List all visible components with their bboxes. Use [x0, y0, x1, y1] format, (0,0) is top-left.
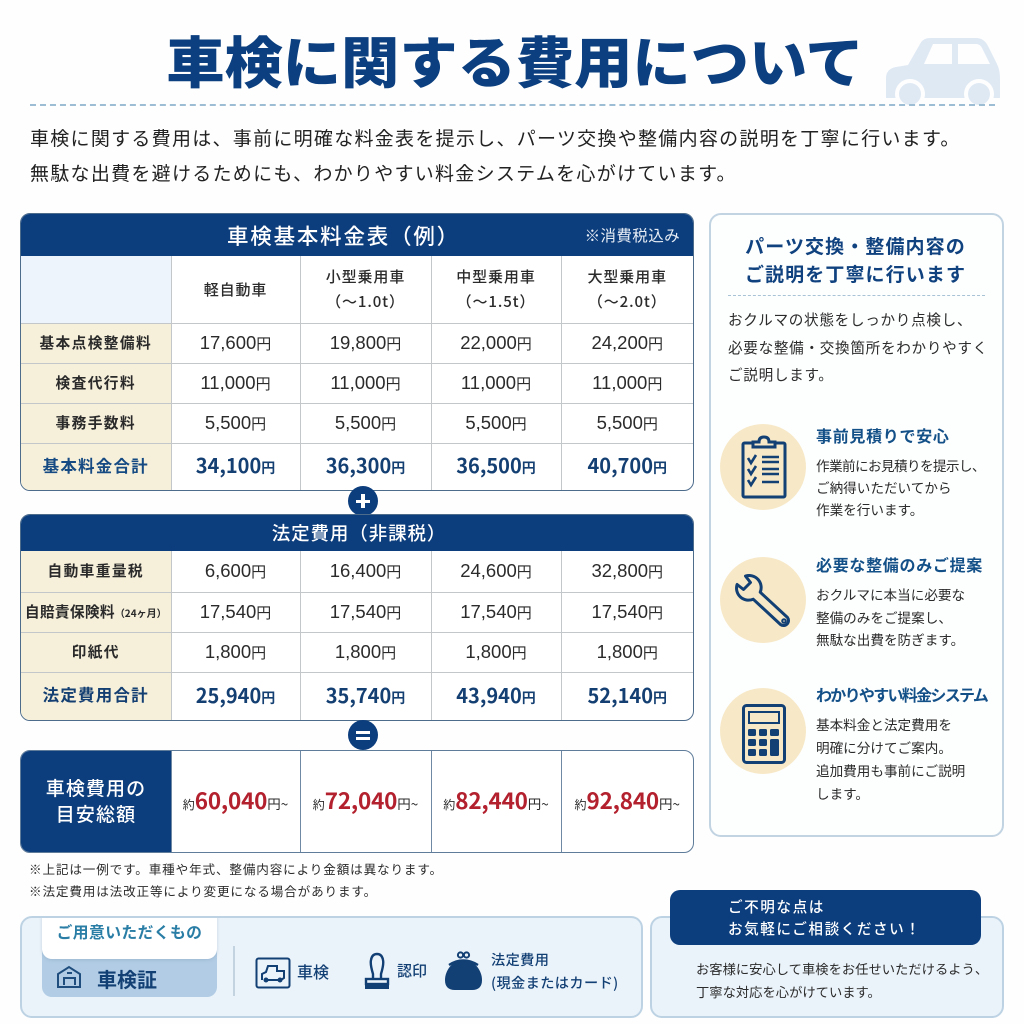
- consultation text: [696, 959, 988, 1001]
- basic fee rows: 11,000円: [592, 372, 662, 394]
- basic fee rows: 中型乗用車: [456, 266, 536, 287]
- icon: certificate: [57, 966, 81, 988]
- label: statutory fees: (現金またはカード): [491, 972, 619, 992]
- panel: basic fee table: [20, 213, 694, 491]
- table header: [21, 515, 693, 551]
- total amounts: 約60,040円~: [183, 784, 288, 816]
- basic fee rows: （～1.5t）: [457, 291, 535, 312]
- basic fee rows: 5,500円: [205, 412, 266, 434]
- icon: calculator: [720, 688, 806, 774]
- item: estimate: 事前見積りで安心: [816, 423, 950, 447]
- total amounts: [171, 751, 680, 852]
- total label: 車検費用の: [46, 774, 146, 801]
- icon: seal stamp: [364, 952, 390, 989]
- basic fee rows: 19,800円: [330, 332, 401, 354]
- tab: heading: ご用意いただくもの: [57, 920, 202, 943]
- statutory fee rows: 43,940円: [456, 680, 536, 709]
- basic fee rows: 17,600円: [200, 332, 271, 354]
- label: statutory fees: 法定費用: [491, 950, 549, 970]
- basic fee rows: 36,300円: [326, 450, 405, 479]
- basic fee rows: 11,000円: [330, 372, 401, 394]
- statutory fee rows: 17,540円: [591, 600, 663, 622]
- footnotes: ※法定費用は法改正等により変更になる場合があります。: [29, 881, 377, 900]
- table header: 法定費用（非課税）: [272, 520, 446, 546]
- statutory fee rows: 17,540円: [460, 600, 532, 622]
- title: 車検に関する費用について: [166, 19, 864, 99]
- icon: car key box: [256, 958, 290, 988]
- statutory fee rows: 1,800円: [335, 640, 396, 662]
- basic fee rows: 11,000円: [200, 372, 271, 394]
- consultation text: お客様に安心して車検をお任せいただけるよう、: [696, 959, 988, 978]
- statutory fee rows: 35,740円: [326, 680, 405, 709]
- basic fee rows: 小型乗用車: [326, 266, 405, 287]
- icon: clipboard: [720, 424, 806, 510]
- item: clear pricing: 明確に分けてご案内。: [816, 737, 952, 757]
- basic fee rows: 22,000円: [460, 332, 532, 354]
- basic fee rows: 検査代行料: [56, 372, 136, 393]
- basic fee rows: 基本点検整備料: [39, 332, 152, 353]
- basic fee rows: 36,500円: [456, 450, 536, 479]
- label: 車検: 車検: [297, 959, 329, 983]
- side heading: [745, 232, 966, 287]
- side heading: パーツ交換・整備内容の: [745, 232, 966, 259]
- basic fee rows: 事務手数料: [56, 412, 136, 433]
- statutory fee rows: 52,140円: [588, 680, 667, 709]
- item: necessary maintenance: おクルマに本当に必要な: [816, 584, 965, 604]
- total label: 目安総額: [56, 800, 136, 827]
- footnotes: ※上記は一例です。車種や年式、整備内容により金額は異なります。: [29, 859, 443, 878]
- item: necessary maintenance: 整備のみをご提案し、: [816, 606, 952, 626]
- consultation text: 丁寧な対応を心がけています。: [696, 982, 881, 1001]
- basic fee rows: 40,700円: [588, 450, 667, 479]
- basic fee rows: 11,000円: [461, 372, 531, 394]
- total amounts: 約72,040円~: [313, 784, 418, 816]
- basic fee rows: 24,200円: [591, 332, 663, 354]
- panel: consultation: [650, 916, 1004, 1018]
- side intro text: 必要な整備・交換箇所をわかりやすく: [728, 336, 988, 358]
- statutory fee rows: 1,800円: [597, 640, 658, 662]
- panel: items to bring: [20, 916, 643, 1018]
- icon: equals: [348, 720, 378, 750]
- table header: 車検基本料金表（例）: [227, 220, 460, 251]
- table header: [21, 214, 693, 256]
- tab: heading: [42, 916, 217, 959]
- item: clear pricing: [816, 682, 988, 803]
- icon: plus: [348, 486, 378, 516]
- icon: coin purse: [445, 951, 482, 990]
- statutory fee rows: 24,600円: [460, 560, 532, 582]
- intro text: [30, 124, 961, 186]
- label: 認印: 認印: [397, 960, 427, 981]
- basic fee rows: （～2.0t）: [588, 291, 667, 312]
- table header: ※消費税込み: [585, 224, 680, 246]
- basic fee rows: 5,500円: [335, 412, 396, 434]
- statutory fee rows: 印紙代: [72, 641, 120, 662]
- statutory fee rows: 17,540円: [200, 600, 271, 622]
- footnotes: [29, 859, 443, 900]
- panel: estimated total: [20, 750, 694, 853]
- basic fee rows: 軽自動車: [204, 279, 267, 300]
- icon: wrench: [720, 557, 806, 643]
- side heading: ご説明を丁寧に行います: [745, 260, 966, 287]
- consultation heading: [670, 890, 981, 945]
- item: clear pricing: 基本料金と法定費用を: [816, 714, 952, 734]
- side intro text: [728, 309, 988, 385]
- statutory fee rows: 法定費用合計: [43, 682, 149, 706]
- tab: vehicle inspection certificate: [42, 948, 217, 997]
- basic fee rows: 大型乗用車: [587, 266, 667, 287]
- basic fee rows: 34,100円: [196, 450, 275, 479]
- statutory fee rows: 16,400円: [330, 560, 401, 582]
- intro text: 無駄な出費を避けるためにも、わかりやすい料金システムを心がけています。: [30, 159, 737, 186]
- side intro text: ご説明します。: [728, 364, 834, 385]
- basic fee rows: 5,500円: [465, 412, 527, 434]
- consultation heading: ご不明な点は: [728, 896, 825, 917]
- statutory fee rows: 6,600円: [205, 560, 266, 582]
- item: clear pricing: わかりやすい料金システム: [816, 682, 987, 706]
- intro text: 車検に関する費用は、事前に明確な料金表を提示し、パーツ交換や整備内容の説明を丁寧に行います。: [30, 124, 961, 151]
- item: necessary maintenance: 無駄な出費を防ぎます。: [816, 629, 964, 649]
- panel: statutory fee table: [20, 514, 694, 721]
- basic fee rows: 5,500円: [597, 412, 658, 434]
- consultation heading: お気軽にご相談ください！: [728, 918, 921, 939]
- statutory fee rows: 32,800円: [591, 560, 663, 582]
- statutory fee rows: 自賠責保険料（24ヶ月）: [25, 601, 167, 622]
- label: statutory fees: [491, 950, 619, 992]
- statutory fee rows: [21, 551, 693, 720]
- basic fee rows: [21, 256, 693, 490]
- item: necessary maintenance: 必要な整備のみご提案: [816, 552, 983, 576]
- basic fee rows: 基本料金合計: [43, 453, 149, 477]
- label: 車検証: 車検証: [97, 964, 157, 993]
- total amounts: 約92,840円~: [574, 784, 680, 816]
- statutory fee rows: 25,940円: [196, 680, 275, 709]
- item: estimate: 作業を行います。: [816, 499, 923, 519]
- item: clear pricing: 追加費用も事前にご説明: [816, 760, 965, 780]
- icon: car watermark: [886, 38, 1000, 105]
- side intro text: おクルマの状態をしっかり点検し、: [728, 309, 972, 330]
- statutory fee rows: 1,800円: [465, 640, 527, 662]
- statutory fee rows: 17,540円: [330, 600, 401, 622]
- statutory fee rows: 自動車重量税: [47, 560, 144, 581]
- total label: [21, 751, 171, 852]
- panel: explanation side: [709, 213, 1004, 837]
- item: estimate: [816, 423, 985, 519]
- item: estimate: 作業前にお見積りを提示し、: [816, 455, 985, 475]
- item: estimate: ご納得いただいてから: [816, 477, 952, 497]
- basic fee rows: （～1.0t）: [326, 291, 405, 312]
- statutory fee rows: 1,800円: [205, 640, 266, 662]
- item: clear pricing: します。: [816, 783, 869, 803]
- item: necessary maintenance: [816, 552, 983, 649]
- total amounts: 約82,440円~: [443, 784, 549, 816]
